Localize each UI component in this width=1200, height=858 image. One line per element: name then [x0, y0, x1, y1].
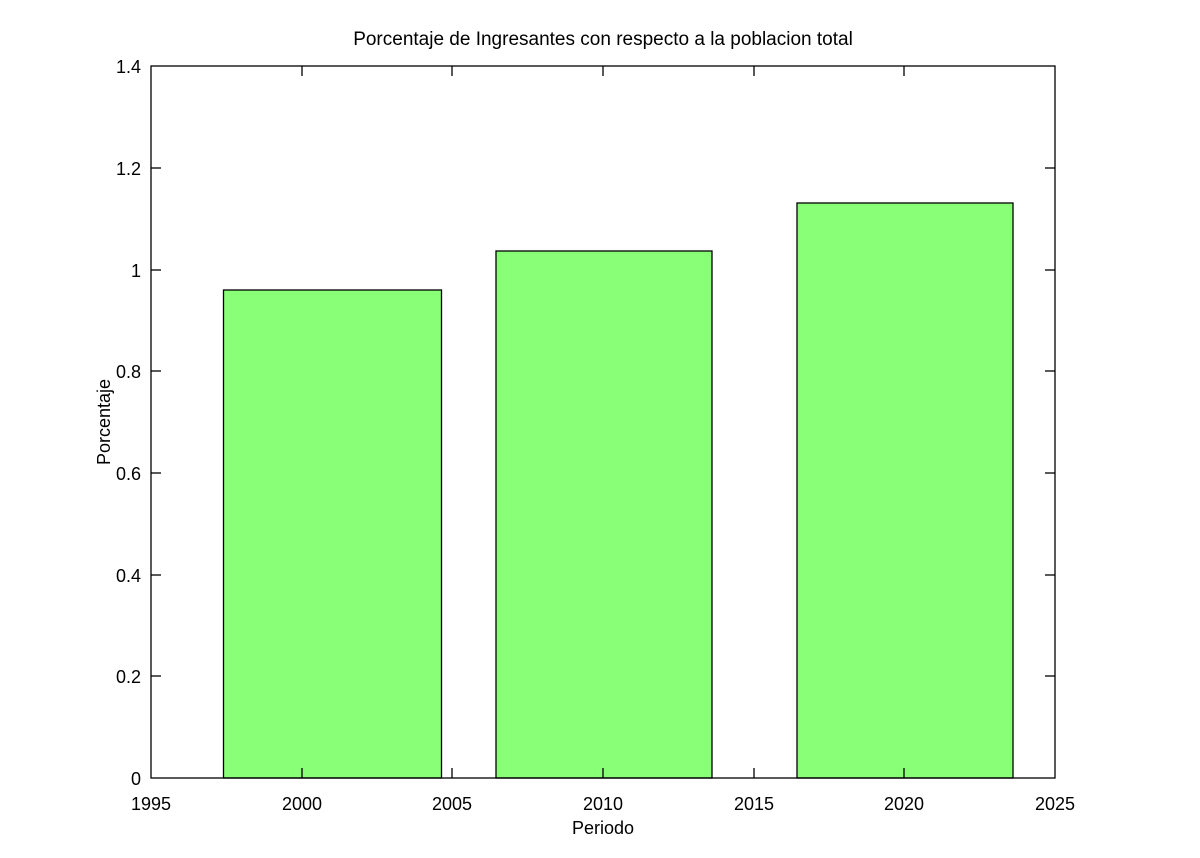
- y axis labels: 1.4: [116, 57, 141, 77]
- x axis labels: 2010: [583, 794, 623, 814]
- x axis title: Periodo: [572, 818, 634, 838]
- y axis title: Porcentaje: [94, 379, 114, 465]
- axes frame: [151, 66, 1055, 778]
- y axis labels: 0.4: [116, 566, 141, 586]
- x axis labels: 2025: [1035, 794, 1075, 814]
- y axis labels: 1: [131, 261, 141, 281]
- y axis labels: [116, 57, 141, 789]
- y axis labels: 0.6: [116, 464, 141, 484]
- y axis labels: 1.2: [116, 159, 141, 179]
- x axis labels: 2005: [432, 794, 472, 814]
- y axis labels: 0.8: [116, 362, 141, 382]
- x axis labels: 2020: [884, 794, 924, 814]
- y axis labels: 0: [131, 769, 141, 789]
- x axis labels: 1995: [131, 794, 171, 814]
- y axis labels: 0.2: [116, 667, 141, 687]
- x axis labels: [131, 794, 1075, 814]
- bars: [224, 203, 1013, 778]
- title: Porcentaje de Ingresantes con respecto a la poblacion total: [353, 29, 853, 50]
- x axis labels: 2015: [734, 794, 774, 814]
- x axis labels: 2000: [282, 794, 322, 814]
- ticks: [151, 66, 1055, 778]
